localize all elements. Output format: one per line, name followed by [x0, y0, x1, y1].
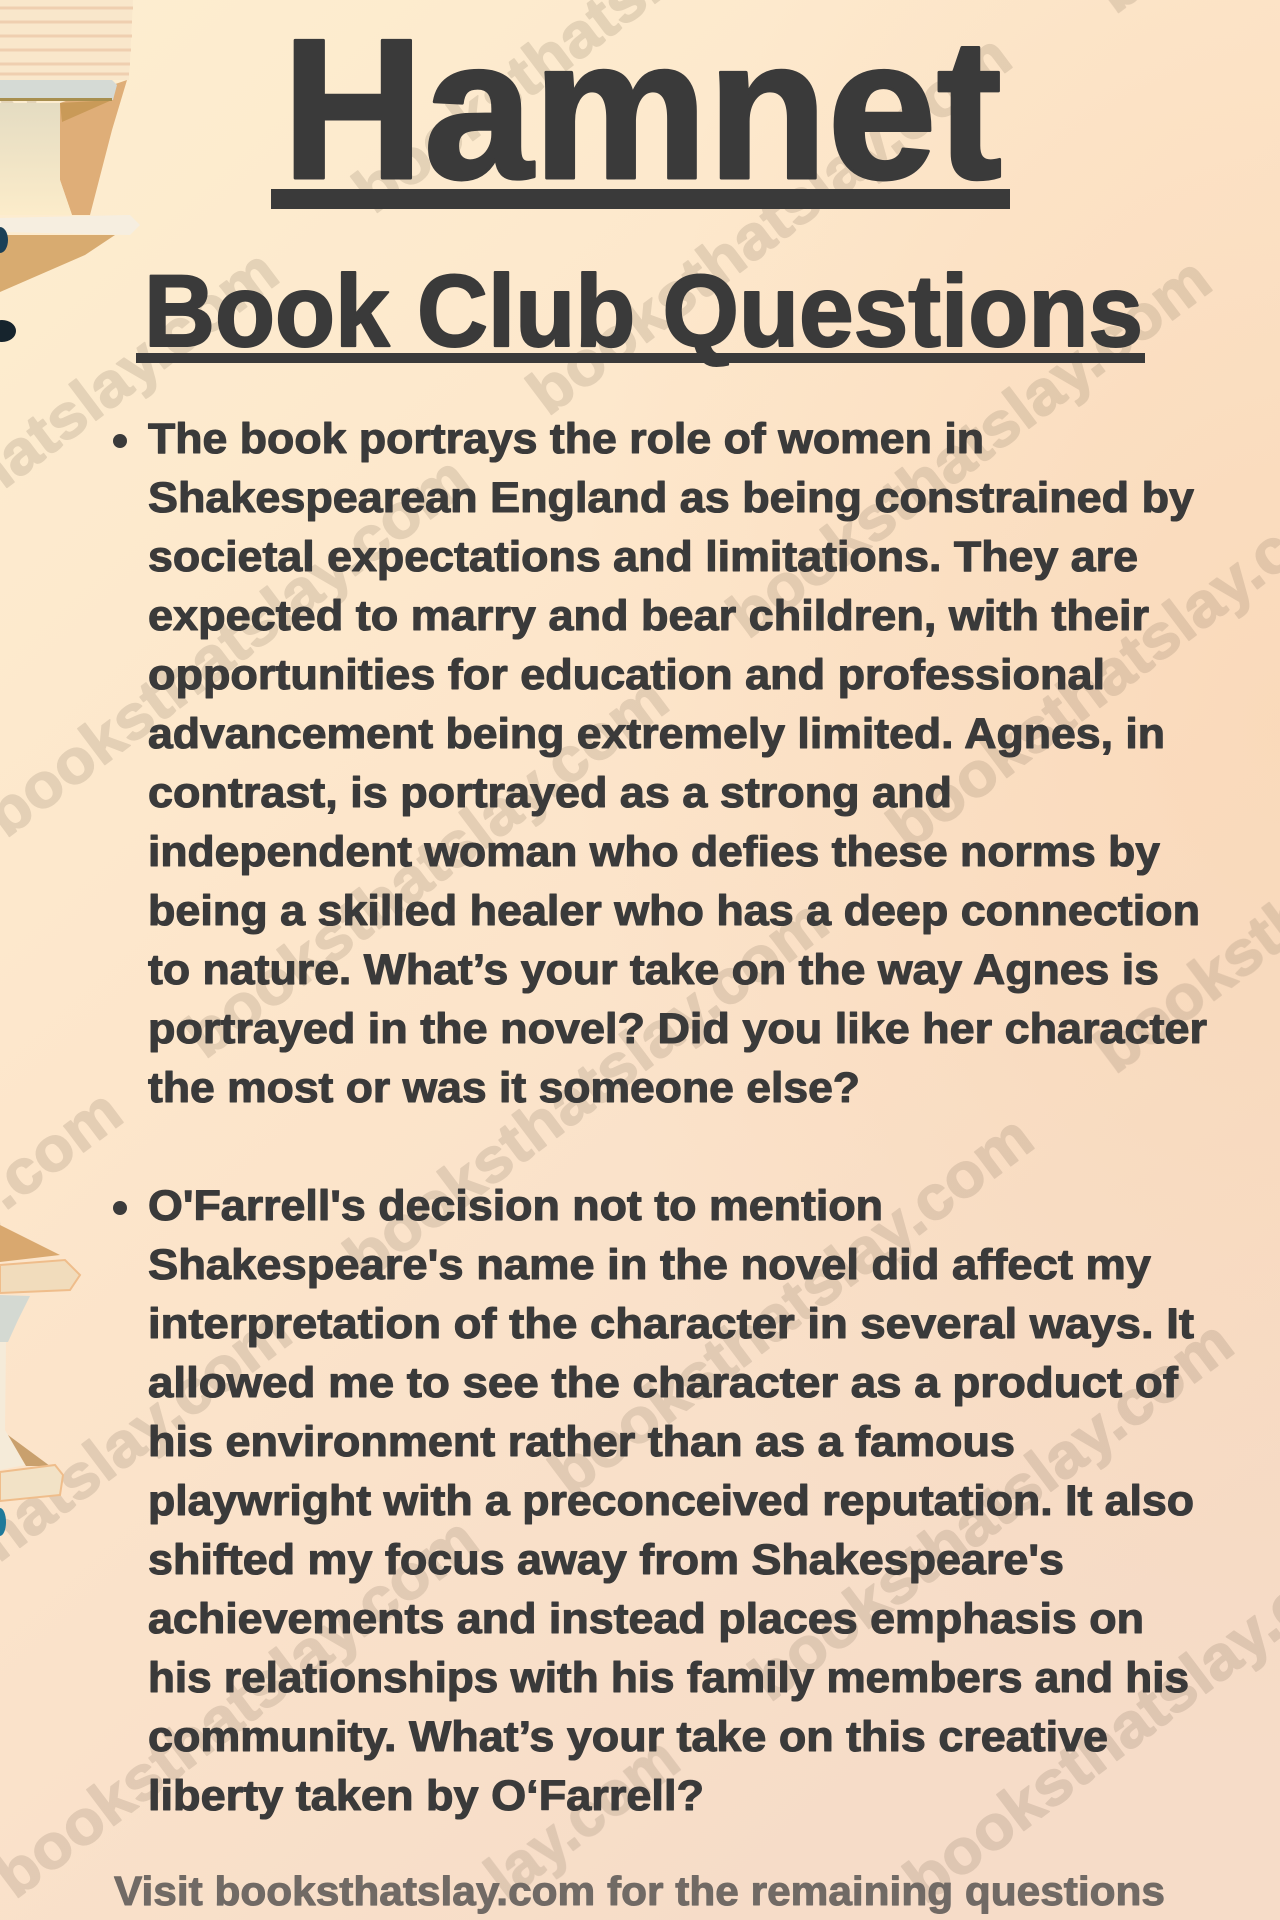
book stack: top left — [0, 0, 140, 342]
watermarks: booksthatslay.com — [715, 244, 1224, 651]
question 1: the most or was it someone else? — [148, 1064, 860, 1112]
watermarks: booksthatslay.com — [515, 21, 1024, 428]
watermarks: booksthatslay.com — [737, 1307, 1246, 1714]
question 2 — [113, 1182, 1194, 1820]
watermarks: lay.com — [473, 1723, 692, 1912]
question 1: advancement being extremely limited. Agnes, in — [148, 710, 1165, 758]
question 2: allowed me to see the character as a product of — [148, 1359, 1179, 1407]
question 2: playwright with a preconceived reputation. It also — [148, 1477, 1194, 1525]
question 2: his environment rather than as a famous — [148, 1418, 1015, 1466]
question 2: Shakespeare's name in the novel did affect my — [148, 1241, 1151, 1289]
question 1: to nature. What’s your take on the way Agnes is — [148, 946, 1159, 994]
question 2: interpretation of the character in several ways. It — [148, 1300, 1194, 1348]
question 1: being a skilled healer who has a deep connection — [148, 887, 1200, 935]
subtitle: Book Club Questions — [144, 254, 1143, 368]
question 1: societal expectations and limitations. They are — [148, 533, 1138, 581]
question 2: achievements and instead places emphasis on — [148, 1595, 1144, 1643]
question 1: The book portrays the role of women in — [148, 415, 984, 463]
title: Hamnet — [282, 0, 1002, 221]
question 2: O'Farrell's decision not to mention — [148, 1182, 883, 1230]
question 2: community. What’s your take on this creative — [148, 1713, 1108, 1761]
question 1 — [113, 415, 1207, 1112]
watermarks: booksthatslay.com — [537, 1102, 1046, 1509]
question 1: independent woman who defies these norms by — [148, 828, 1160, 876]
book stack: lower left — [0, 1225, 80, 1536]
question 1: opportunities for education and professional — [148, 651, 1105, 699]
watermarks: booksthatslay.com — [332, 886, 841, 1293]
question 2: liberty taken by O‘Farrell? — [148, 1772, 704, 1820]
question 1: contrast, is portrayed as a strong and — [148, 769, 952, 817]
footer call to action: Visit booksthatslay.com for the remaining questions — [114, 1868, 1165, 1914]
watermarks: booksthatslay.com — [172, 664, 681, 1071]
question 1: Shakespearean England as being constrained by — [148, 474, 1194, 522]
question 1: portrayed in the novel? Did you like her character — [148, 1005, 1207, 1053]
question 2: his relationships with his family members and his — [148, 1654, 1189, 1702]
question 1: expected to marry and bear children, with their — [148, 592, 1149, 640]
question 2: shifted my focus away from Shakespeare's — [148, 1536, 1064, 1584]
